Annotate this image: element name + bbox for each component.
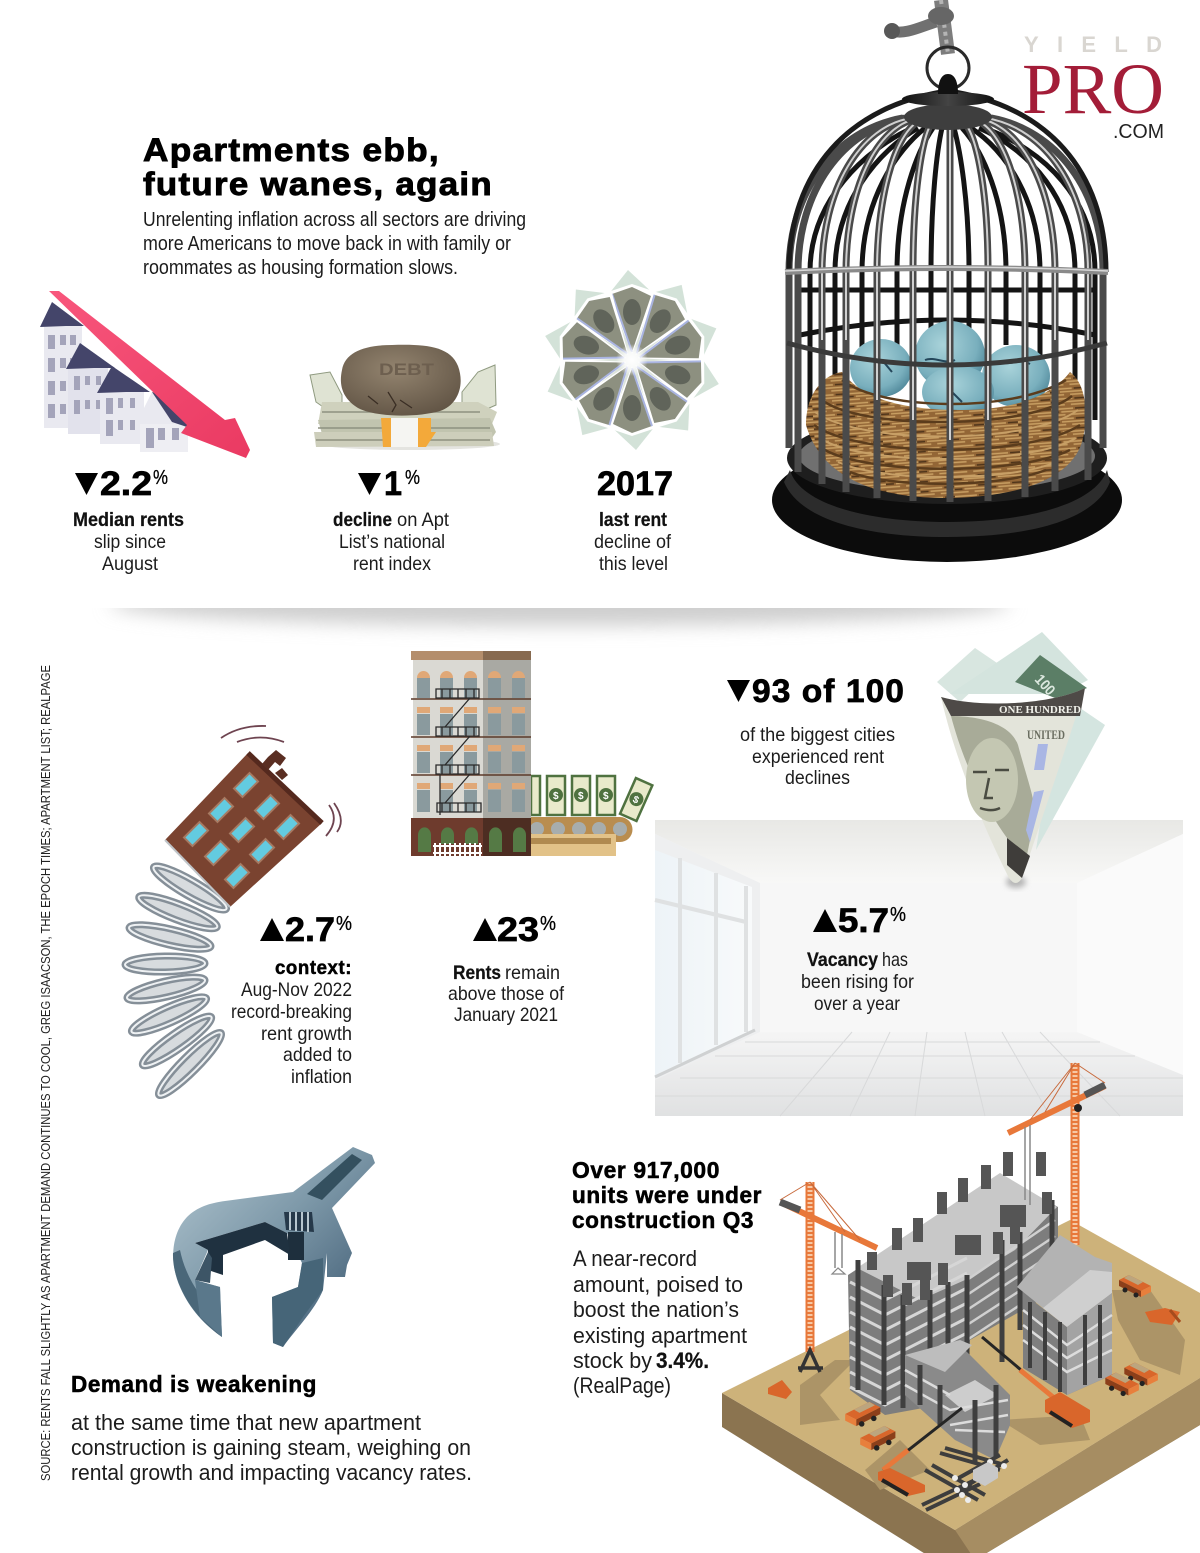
jaw inner faces <box>195 1222 290 1275</box>
text: units under construction: amount, poised to <box>573 1272 743 1297</box>
stat: rents above January 2021: remain <box>505 962 560 984</box>
stat: vacancy: 5.7 <box>838 902 889 940</box>
wrench worm screw <box>284 1212 314 1260</box>
rooftop wall stubs <box>867 1152 1052 1305</box>
logo: Yield Pro: .COM <box>1113 121 1164 143</box>
stat: rents above January 2021: Rents <box>453 962 501 984</box>
concrete block <box>973 1462 998 1486</box>
pipe joints <box>952 1459 1007 1503</box>
rear bars <box>800 128 1095 420</box>
left crane <box>780 1182 877 1372</box>
stat: context <box>231 911 352 1088</box>
stat: 2017: decline of <box>594 531 672 553</box>
base <box>772 412 1122 562</box>
text: units under construction: A near-record <box>573 1246 697 1271</box>
dollar bills: $ <box>631 794 641 807</box>
stat: 2017: last rent <box>599 509 667 531</box>
text: units under construction: construction Q3 <box>572 1207 754 1233</box>
wrench slot <box>307 1154 362 1200</box>
stat: decline on Apt List: rent index <box>353 553 431 575</box>
dollar bills: $ <box>603 791 609 802</box>
cone shadow <box>1006 876 1026 888</box>
crawler crane right <box>982 1337 1090 1428</box>
icon: tenement building on conveyor with dollars <box>411 651 652 856</box>
stat: context: rent growth <box>261 1023 352 1045</box>
truck <box>1119 1275 1151 1298</box>
stat: median rents: 2.2 <box>100 465 152 503</box>
bills sticking out: 100 <box>1031 671 1058 699</box>
soft shadow divider <box>112 608 1008 634</box>
stat: vacancy: % <box>890 904 906 926</box>
right crane jib <box>1008 1063 1105 1205</box>
text: demand is weakening: rental growth and impacting vacancy rates. <box>71 1460 472 1485</box>
text: units under construction: stock by <box>573 1348 653 1373</box>
brick building <box>165 750 322 907</box>
house 1 <box>40 302 84 428</box>
source note: SOURCE: RENTS FALL SLIGHTLY AS APARTMENT DEMAND CONTINUES TO COOL, GREG ISAACSON, THE EPOCH TIMES; APARTMENT LIST; REALPAGE <box>38 665 53 1481</box>
intro text <box>143 209 526 279</box>
dump truck upper <box>845 1402 880 1427</box>
dump truck lower <box>860 1426 895 1451</box>
cage bands <box>785 267 1108 365</box>
intro text: more Americans to move back in with family or <box>143 233 511 255</box>
stat: context: 2.7 <box>285 911 335 949</box>
conveyor belt <box>530 817 632 856</box>
stat: context: context: <box>275 957 352 979</box>
dome hub <box>902 74 994 130</box>
mixer truck front <box>1105 1372 1139 1396</box>
text: demand is weakening: at the same time that new apartment <box>71 1410 422 1435</box>
windows <box>417 678 525 812</box>
stat: decline on Apt List <box>333 465 450 575</box>
text: units under construction: Over 917,000 <box>572 1157 720 1183</box>
front bars <box>789 100 1103 502</box>
excavated pits <box>800 1290 1185 1490</box>
logo: Yield Pro: YIELD <box>1024 32 1162 57</box>
dollar bills: $ <box>553 791 559 802</box>
stat: 93 of 100: of the biggest cities <box>740 724 895 746</box>
stat: context: Aug-Nov 2022 <box>241 979 352 1001</box>
stat: decline on Apt List: decline <box>333 509 392 531</box>
right block <box>1017 1235 1112 1395</box>
text: units under construction: boost the nation’s <box>573 1297 739 1322</box>
panel: empty room <box>655 820 1183 1116</box>
stat: context: added to <box>283 1044 352 1066</box>
crawler crane left <box>878 1408 962 1496</box>
stat: decline on Apt List: % <box>405 467 420 489</box>
text: units under construction <box>572 1157 762 1398</box>
main tower <box>848 1173 1058 1415</box>
stat: 93 of 100 <box>727 673 905 789</box>
icon: debt rock on cash <box>310 345 500 450</box>
ground floor doors <box>418 827 526 852</box>
stat: vacancy <box>801 902 914 1015</box>
nest <box>806 372 1086 498</box>
stat: 2017 <box>594 465 673 575</box>
ground block <box>722 1220 1200 1553</box>
icon: adjustable wrench <box>173 1147 375 1347</box>
stat: 2017: this level <box>599 553 668 575</box>
text: demand is weakening: Demand is weakening <box>71 1371 317 1397</box>
cone face <box>941 688 1085 883</box>
stat: 93 of 100: experienced rent <box>752 746 885 768</box>
house 3 <box>97 366 150 444</box>
hanging ring <box>927 47 969 89</box>
right crane mast (rear) <box>1070 1063 1080 1245</box>
stat: vacancy: has <box>882 949 908 971</box>
red arrow <box>49 291 250 458</box>
eggs <box>850 321 1050 418</box>
ceiling <box>655 820 1183 883</box>
house 4 <box>136 392 190 452</box>
stat: vacancy: Vacancy <box>807 949 878 971</box>
cone face: UNITED <box>1027 727 1065 742</box>
text: units under construction: (RealPage) <box>573 1373 671 1398</box>
stat: decline on Apt List: List’s national <box>339 531 445 553</box>
stat: median rents: Median rents <box>73 509 184 531</box>
stat: context: record-breaking <box>231 1001 352 1023</box>
text: units under construction: units were under <box>572 1182 762 1208</box>
stat: rents above January 2021: % <box>540 913 556 935</box>
illustration: isometric construction site <box>722 1063 1200 1553</box>
stat: 2017: 2017 <box>597 465 673 503</box>
icon: houses with falling red arrow <box>40 291 250 458</box>
intro text: roommates as housing formation slows. <box>143 257 458 279</box>
stat: context: % <box>336 913 352 935</box>
right wall <box>1077 834 1183 1075</box>
text: demand is weakening: construction is gaining steam, weighing on <box>71 1435 471 1460</box>
dollar bills: $ <box>578 791 584 802</box>
cone face: ONE HUNDRED <box>999 704 1081 716</box>
stat: median rents: slip since <box>94 531 166 553</box>
text: units under construction: existing apartment <box>573 1323 748 1348</box>
spring coils <box>125 860 230 1101</box>
bulldozer <box>768 1380 792 1399</box>
stat: rents above January 2021: above those of <box>448 983 565 1005</box>
cash stack <box>310 365 500 450</box>
stat: median rents: % <box>153 467 168 489</box>
white picket fence <box>433 843 482 856</box>
excavator <box>1145 1308 1180 1325</box>
tiled floor <box>655 1032 1183 1116</box>
stat: decline on Apt List: on Apt <box>397 509 450 531</box>
orange money band <box>381 418 436 447</box>
stat: vacancy: been rising for <box>801 971 914 993</box>
rock: DEBT <box>379 360 435 379</box>
title: future wanes, again <box>143 166 493 202</box>
stat: rents above January 2021 <box>448 911 565 1026</box>
intro text: Unrelenting inflation across all sectors are driving <box>143 209 526 231</box>
rock <box>341 345 461 416</box>
low block <box>905 1340 1010 1462</box>
stat: context: inflation <box>291 1066 352 1088</box>
building windows <box>184 773 299 888</box>
bills sticking out <box>937 632 1105 850</box>
stat: 93 of 100: 93 of 100 <box>752 673 905 709</box>
mixer truck rear <box>1124 1362 1158 1386</box>
foundation pipes <box>922 1448 1008 1510</box>
dome outline <box>789 91 1106 272</box>
stat: vacancy: over a year <box>814 993 900 1015</box>
illustration: birdcage with nest <box>772 0 1122 562</box>
house 2 <box>66 343 115 434</box>
text: demand is weakening <box>71 1371 472 1485</box>
stat: rents above January 2021: 23 <box>497 911 539 949</box>
spring highlights <box>125 860 230 1101</box>
rope <box>884 0 954 54</box>
outer rim shade <box>173 1250 222 1337</box>
stat: 93 of 100: declines <box>785 767 850 789</box>
icon: dollar bill cone <box>937 632 1105 888</box>
building facade <box>411 651 531 856</box>
back wall <box>655 820 1183 1116</box>
stat: median rents <box>73 465 184 575</box>
wrench body <box>173 1147 375 1347</box>
text: units under construction: 3.4%. <box>656 1348 709 1373</box>
fire escape <box>436 689 481 815</box>
icon: building on a spring <box>125 726 341 1101</box>
icon: ring of folded dollar bills <box>538 270 726 450</box>
stat: median rents: August <box>102 553 159 575</box>
title <box>143 132 493 202</box>
stat: rents above January 2021: January 2021 <box>454 1004 558 1026</box>
logo: Yield Pro: PRO <box>1022 49 1164 129</box>
stat: decline on Apt List: 1 <box>384 465 402 503</box>
motion arcs <box>221 726 341 836</box>
bar highlights <box>822 100 1088 440</box>
window wall <box>655 834 760 1080</box>
dollar bills <box>531 776 652 821</box>
window lintels <box>417 671 525 789</box>
title: Apartments ebb, <box>143 132 440 168</box>
